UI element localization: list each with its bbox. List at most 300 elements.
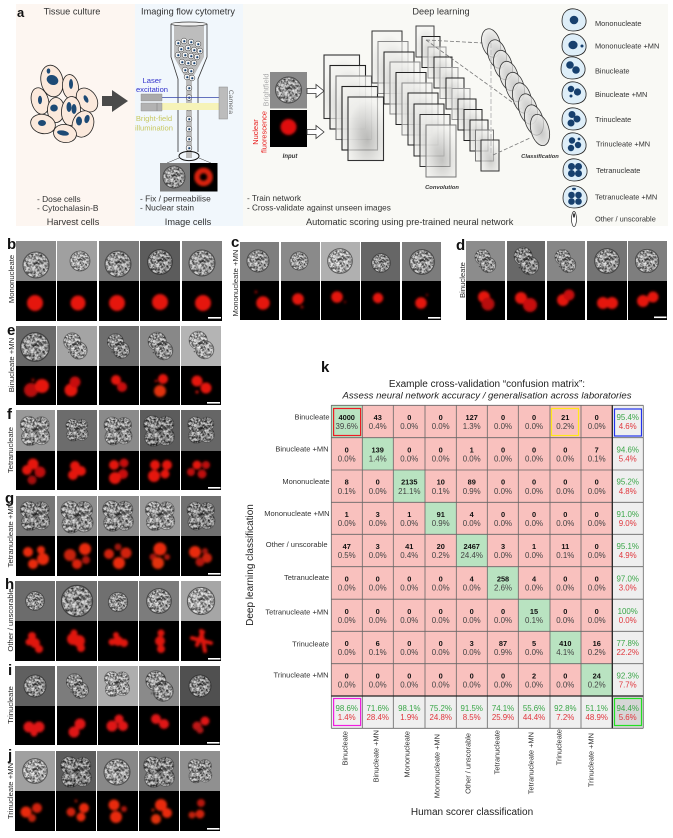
highlight boxes bbox=[334, 408, 642, 726]
recall row: 48.9% bbox=[586, 713, 608, 722]
row: trinucleate: 0.0% bbox=[432, 648, 450, 657]
arrow: brightfield into network bbox=[307, 84, 324, 98]
panel j: trinucleate +MN bbox=[6, 747, 220, 831]
label: camera: Camera bbox=[227, 90, 234, 114]
legend labels: Trinucleate +MN bbox=[596, 140, 650, 148]
row: trinucleate: 0.0% bbox=[338, 648, 356, 657]
column labels bbox=[340, 729, 596, 798]
y axis title: Deep learning classification bbox=[245, 504, 256, 626]
brightfield row e bbox=[16, 326, 221, 366]
row: trinucleate: 0.0% bbox=[463, 648, 481, 657]
precision column: 4.9% bbox=[619, 551, 637, 560]
column labels: Tetranucleate bbox=[492, 730, 502, 774]
row: tetranucleate: 0.0% bbox=[556, 584, 574, 593]
recall row: 92.8% bbox=[554, 704, 576, 713]
legend labels: Binucleate bbox=[595, 66, 630, 76]
row: mononucleate +MN: 0.9% bbox=[432, 519, 450, 528]
row: binucleate +MN: 7 bbox=[595, 445, 599, 454]
legend labels: Binucleate +MN bbox=[595, 90, 647, 99]
label: nuclear fluorescence: Nuclear bbox=[251, 119, 260, 145]
row: mononucleate +MN: 0.0% bbox=[369, 519, 387, 528]
side label: tetranucleate +MN: Tetranucleate +MN bbox=[6, 503, 15, 567]
classification layer bbox=[479, 27, 553, 148]
row: tetranucleate +MN: 0 bbox=[345, 607, 349, 616]
row: trinucleate: 0 bbox=[439, 639, 443, 648]
row: trinucleate +MN: 0.0% bbox=[463, 681, 481, 690]
row: trinucleate +MN: 0 bbox=[501, 671, 505, 680]
column labels: Mononucleate bbox=[402, 731, 412, 777]
row: tetranucleate bbox=[338, 574, 606, 593]
row: mononucleate: 0.9% bbox=[463, 487, 481, 496]
label: convolution: Convolution bbox=[425, 185, 459, 191]
diagram: flow cytometer bbox=[167, 22, 211, 163]
row: mononucleate: 0 bbox=[376, 478, 380, 487]
precision column: 4.6% bbox=[619, 422, 637, 431]
panel i: trinucleate bbox=[6, 662, 220, 745]
row: other / unscorable: 47 bbox=[343, 542, 351, 551]
row: mononucleate +MN: 0 bbox=[595, 510, 599, 519]
row: binucleate: 0 bbox=[532, 413, 536, 422]
row: trinucleate: 410 bbox=[559, 639, 571, 648]
text: train network: - Train network bbox=[247, 194, 301, 203]
side label: tetranucleate: Tetranucleate bbox=[6, 427, 15, 473]
panel letter c: c bbox=[231, 234, 239, 251]
row: trinucleate +MN: 0 bbox=[345, 671, 349, 680]
recall row: 98.6% bbox=[336, 704, 358, 713]
row: binucleate +MN bbox=[338, 445, 606, 464]
label: bright-field illumination: Bright-field bbox=[136, 114, 172, 123]
row: binucleate: 39.6% bbox=[336, 422, 358, 431]
row: tetranucleate +MN: 0.0% bbox=[588, 616, 606, 625]
row: mononucleate +MN: 0.0% bbox=[494, 519, 512, 528]
row: tetranucleate +MN: 0.0% bbox=[338, 616, 356, 625]
panel letter f: f bbox=[7, 406, 13, 423]
row labels: Mononucleate +MN bbox=[264, 509, 330, 518]
row: trinucleate bbox=[338, 639, 606, 657]
label: input: Input bbox=[283, 154, 298, 160]
row: mononucleate: 0.0% bbox=[525, 487, 543, 496]
row: trinucleate +MN: 0.0% bbox=[369, 681, 387, 690]
row: binucleate: 0.2% bbox=[556, 422, 574, 431]
recall row: 75.2% bbox=[430, 704, 452, 713]
row: trinucleate +MN: 24 bbox=[593, 671, 602, 680]
row: other / unscorable: 0.0% bbox=[494, 551, 512, 560]
class icon: mononucleate +MN bbox=[562, 34, 586, 56]
row: trinucleate: 87 bbox=[499, 639, 507, 648]
panel h: other / unscorable bbox=[5, 576, 221, 661]
label: brightfield: Brightfield bbox=[262, 74, 270, 106]
row: mononucleate: 0.1% bbox=[338, 487, 356, 496]
legend labels: Other / unscorable bbox=[595, 214, 656, 224]
row: trinucleate +MN: 0.0% bbox=[494, 681, 512, 690]
row: binucleate: 21 bbox=[561, 413, 569, 422]
row: binucleate: 0 bbox=[595, 413, 599, 422]
row: tetranucleate: 0.0% bbox=[432, 584, 450, 593]
fluorescence row f bbox=[16, 451, 221, 490]
precision column: 5.4% bbox=[619, 455, 637, 464]
row: binucleate: 1.3% bbox=[463, 422, 481, 431]
row: other / unscorable: 0 bbox=[595, 542, 599, 551]
row: mononucleate: 0 bbox=[563, 478, 567, 487]
column labels: Trinucleate bbox=[554, 729, 564, 765]
fluorescence row j bbox=[15, 791, 220, 831]
side label: trinucleate: Trinucleate bbox=[6, 686, 15, 724]
side label: binucleate: Binucleate bbox=[458, 262, 467, 298]
recall row: 94.4% bbox=[617, 704, 639, 713]
arrow: culture to cytometry bbox=[102, 90, 128, 112]
row: trinucleate +MN: 2 bbox=[532, 671, 536, 680]
arrow: fluorescence into network bbox=[307, 126, 324, 138]
row: tetranucleate +MN: 15 bbox=[530, 607, 538, 616]
laser and illumination optics bbox=[141, 87, 228, 119]
row: mononucleate +MN: 1 bbox=[407, 510, 411, 519]
text: fix and nuclear stain: - Fix / permeabilise bbox=[140, 194, 211, 204]
row: tetranucleate: 0.0% bbox=[338, 584, 356, 593]
row: binucleate +MN: 0.0% bbox=[494, 455, 512, 464]
fluorescence row b bbox=[16, 281, 222, 321]
row: mononucleate +MN: 0.0% bbox=[463, 519, 481, 528]
precision column: 77.8% bbox=[617, 639, 639, 648]
row: trinucleate: 0.1% bbox=[369, 648, 387, 657]
row: mononucleate +MN: 0.0% bbox=[525, 519, 543, 528]
label: bright-field illumination: illumination bbox=[135, 124, 173, 132]
row: mononucleate +MN: 0.0% bbox=[588, 519, 606, 528]
row: binucleate +MN: 0.0% bbox=[525, 455, 543, 464]
recall row: 1.9% bbox=[400, 713, 418, 722]
side label: trinucleate +MN: Trinucleate +MN bbox=[6, 763, 15, 819]
panel letter h: h bbox=[5, 576, 14, 593]
row: tetranucleate: 2.6% bbox=[494, 584, 512, 593]
row: binucleate: 0 bbox=[501, 413, 505, 422]
row: binucleate +MN: 1.4% bbox=[369, 455, 387, 464]
row: trinucleate: 0 bbox=[407, 639, 411, 648]
class icon: binucleate bbox=[561, 57, 585, 79]
class icon: trinucleate +MN bbox=[562, 133, 586, 155]
row: trinucleate +MN: 0 bbox=[376, 671, 380, 680]
row: mononucleate +MN: 0.0% bbox=[338, 519, 356, 528]
row: tetranucleate +MN bbox=[338, 607, 606, 625]
class icon: binucleate +MN bbox=[562, 82, 586, 104]
row: trinucleate +MN: 0.0% bbox=[432, 681, 450, 690]
recall row: 51.1% bbox=[586, 704, 608, 713]
row: mononucleate: 2135 bbox=[401, 478, 418, 487]
recall row: 55.6% bbox=[523, 704, 545, 713]
panel a background: imaging flow cytometry bbox=[135, 4, 243, 226]
fluorescence row e bbox=[16, 366, 221, 405]
panel b: mononucleate bbox=[7, 236, 222, 321]
row: other / unscorable: 1 bbox=[532, 542, 536, 551]
recall row bbox=[336, 704, 639, 722]
row: binucleate: 0.0% bbox=[494, 422, 512, 431]
side label: binucleate +MN: Binucleate +MN bbox=[7, 338, 16, 392]
recall row: 25.9% bbox=[492, 713, 514, 722]
row labels: Binucleate +MN bbox=[275, 444, 328, 454]
row: other / unscorable: 0.1% bbox=[556, 551, 574, 560]
row: trinucleate +MN: 0 bbox=[407, 671, 411, 680]
row: trinucleate: 0 bbox=[345, 639, 349, 648]
row: tetranucleate: 0 bbox=[407, 574, 411, 583]
heading: tissue culture: Tissue culture bbox=[44, 6, 100, 16]
row: tetranucleate +MN: 0.0% bbox=[463, 616, 481, 625]
icon: tissue culture cells bbox=[28, 63, 102, 144]
fluorescence row g bbox=[16, 536, 221, 576]
row: tetranucleate: 0.0% bbox=[463, 584, 481, 593]
panel k: confusion matrix bbox=[245, 359, 643, 818]
x axis title: Human scorer classification bbox=[411, 807, 533, 818]
row: binucleate +MN: 139 bbox=[372, 445, 384, 454]
row: trinucleate +MN: 0.0% bbox=[556, 681, 574, 690]
row: binucleate +MN: 0 bbox=[439, 445, 443, 454]
row: tetranucleate: 0.0% bbox=[369, 584, 387, 593]
row: binucleate +MN: 0.0% bbox=[432, 455, 450, 464]
heading: imaging flow cytometry: Imaging flow cytometry bbox=[141, 6, 235, 16]
text: dose cells: - Cytochalasin-B bbox=[37, 203, 99, 213]
row: mononucleate: 21.1% bbox=[398, 487, 420, 496]
row: binucleate: 0.0% bbox=[400, 422, 418, 431]
convolution layers: group 1 bbox=[324, 55, 384, 160]
row: trinucleate: 0.0% bbox=[400, 648, 418, 657]
row: mononucleate: 10 bbox=[437, 478, 445, 487]
row labels: Other / unscorable bbox=[266, 540, 328, 549]
row labels: Binucleate bbox=[294, 412, 330, 422]
row: mononucleate: 8 bbox=[345, 478, 349, 487]
precision column: 91.0% bbox=[617, 510, 639, 519]
column labels: Trinucleate +MN bbox=[586, 733, 596, 787]
row: trinucleate: 3 bbox=[470, 639, 474, 648]
row: tetranucleate: 258 bbox=[497, 574, 509, 583]
row: binucleate: 4000 bbox=[338, 413, 355, 422]
row: tetranucleate +MN: 0 bbox=[563, 607, 567, 616]
row: trinucleate +MN: 0 bbox=[470, 671, 474, 680]
input images bbox=[270, 72, 307, 147]
row labels: Tetranucleate bbox=[284, 573, 329, 582]
precision column: 95.4% bbox=[617, 413, 639, 422]
recall row: 74.1% bbox=[492, 704, 514, 713]
legend labels bbox=[595, 19, 659, 224]
row: binucleate +MN: 1 bbox=[470, 445, 474, 454]
row: tetranucleate +MN: 0.1% bbox=[525, 616, 543, 625]
recall row: 28.4% bbox=[367, 713, 389, 722]
legend labels: Tetranucleate +MN bbox=[595, 192, 657, 202]
row: other / unscorable: 2467 bbox=[463, 542, 480, 551]
row: other / unscorable: 24.4% bbox=[461, 551, 483, 560]
row: mononucleate: 0.0% bbox=[556, 487, 574, 496]
matrix grid lines bbox=[331, 405, 643, 728]
precision column: 9.0% bbox=[619, 519, 637, 528]
panel letter i: i bbox=[8, 662, 12, 679]
row: tetranucleate +MN: 0.0% bbox=[494, 616, 512, 625]
column labels: Tetranucleate +MN bbox=[526, 732, 536, 794]
row: tetranucleate +MN: 0 bbox=[439, 607, 443, 616]
side label: other / unscorable: Other / unscorable bbox=[6, 588, 15, 652]
row: trinucleate +MN: 0.0% bbox=[525, 681, 543, 690]
matrix cell backgrounds bbox=[331, 405, 643, 728]
row: mononucleate +MN: 0 bbox=[501, 510, 505, 519]
convolution layers: group 2 bbox=[372, 31, 456, 177]
fluorescence row d bbox=[466, 281, 667, 320]
panel e: binucleate +MN bbox=[7, 322, 221, 405]
row: tetranucleate +MN: 0.0% bbox=[400, 616, 418, 625]
row: tetranucleate +MN: 0.0% bbox=[369, 616, 387, 625]
precision column: 94.6% bbox=[617, 445, 639, 454]
matrix values bbox=[336, 413, 606, 690]
text: fix and nuclear stain: - Nuclear stain bbox=[140, 202, 194, 212]
recall row: 98.1% bbox=[398, 704, 420, 713]
row: binucleate +MN: 0 bbox=[501, 445, 505, 454]
row: trinucleate +MN: 0.0% bbox=[338, 681, 356, 690]
row: tetranucleate +MN: 0 bbox=[595, 607, 599, 616]
row: mononucleate: 89 bbox=[468, 478, 476, 487]
row: binucleate +MN: 0 bbox=[407, 445, 411, 454]
row: tetranucleate: 4 bbox=[470, 574, 475, 583]
brightfield row b bbox=[16, 241, 222, 281]
panel letter e: e bbox=[7, 322, 15, 339]
row: other / unscorable: 0.5% bbox=[338, 551, 356, 560]
row: mononucleate: 0.0% bbox=[369, 487, 387, 496]
row: binucleate +MN: 0 bbox=[563, 445, 567, 454]
recall row: 5.6% bbox=[619, 713, 637, 722]
row: binucleate bbox=[336, 413, 606, 431]
brightfield row h bbox=[15, 581, 221, 621]
row: mononucleate: 0.1% bbox=[432, 487, 450, 496]
panel letter b: b bbox=[7, 236, 16, 253]
row: binucleate +MN: 0.1% bbox=[588, 455, 606, 464]
precision column: 0.0% bbox=[619, 616, 637, 625]
row: trinucleate +MN: 0 bbox=[563, 671, 567, 680]
precision column: 97.0% bbox=[617, 574, 639, 583]
row: other / unscorable: 20 bbox=[437, 542, 445, 551]
row: mononucleate: 0 bbox=[501, 478, 505, 487]
row: mononucleate +MN: 3 bbox=[376, 510, 380, 519]
precision column: 95.1% bbox=[617, 542, 639, 551]
recall row: 24.8% bbox=[430, 713, 452, 722]
row: binucleate: 0.0% bbox=[525, 422, 543, 431]
column labels: Other / unscorable bbox=[464, 733, 472, 794]
row: tetranucleate: 0 bbox=[376, 574, 380, 583]
legend labels: Tetranucleate bbox=[596, 166, 640, 175]
row: tetranucleate +MN: 0.0% bbox=[556, 616, 574, 625]
text: dose cells: - Dose cells bbox=[37, 194, 81, 204]
class icon: mononucleate bbox=[562, 9, 586, 31]
recall row: 1.4% bbox=[338, 713, 356, 722]
row: binucleate +MN: 0.0% bbox=[400, 455, 418, 464]
row: mononucleate +MN: 0.0% bbox=[556, 519, 574, 528]
row: mononucleate: 0.0% bbox=[494, 487, 512, 496]
panel g: tetranucleate +MN bbox=[5, 490, 221, 576]
fluorescence row i bbox=[15, 706, 220, 745]
image: cytometer brightfield and fluorescence output bbox=[160, 163, 218, 192]
recall row: 44.4% bbox=[523, 713, 545, 722]
chart subtitle: Assess neural network accuracy / generalisation across laboratories bbox=[341, 390, 632, 402]
row: binucleate: 0 bbox=[439, 413, 443, 422]
brightfield row d bbox=[466, 241, 667, 281]
dashed projection lines bbox=[426, 40, 530, 155]
row: mononucleate: 0.0% bbox=[588, 487, 606, 496]
row: other / unscorable: 0.2% bbox=[432, 551, 450, 560]
recall row: 71.6% bbox=[367, 704, 389, 713]
row: binucleate: 127 bbox=[466, 413, 478, 422]
row: other / unscorable: 3 bbox=[376, 542, 380, 551]
row: mononucleate +MN: 0.0% bbox=[400, 519, 418, 528]
panel c: mononucleate +MN bbox=[231, 234, 441, 320]
row: binucleate +MN: 0 bbox=[532, 445, 536, 454]
fluorescence row c bbox=[240, 281, 441, 320]
recall row: 8.5% bbox=[463, 713, 481, 722]
row: trinucleate: 0.2% bbox=[588, 648, 606, 657]
legend: output classes bbox=[561, 9, 659, 226]
panel d: binucleate bbox=[456, 237, 667, 320]
row labels: Trinucleate +MN bbox=[274, 670, 328, 680]
side label: mononucleate: Mononucleate bbox=[7, 255, 16, 303]
row: tetranucleate: 0 bbox=[563, 574, 567, 583]
column labels: Binucleate bbox=[340, 731, 350, 766]
row: other / unscorable: 0.0% bbox=[369, 551, 387, 560]
row labels bbox=[264, 412, 330, 680]
row: binucleate: 0.4% bbox=[369, 422, 387, 431]
caption: image cells: Image cells bbox=[165, 217, 212, 227]
precision column: 22.2% bbox=[617, 648, 639, 657]
chart title: Example cross-validation “confusion matrix”: bbox=[389, 379, 585, 390]
row: trinucleate +MN: 0 bbox=[439, 671, 443, 680]
row: tetranucleate +MN: 0 bbox=[470, 607, 474, 616]
row: mononucleate +MN: 0 bbox=[563, 510, 567, 519]
heading: deep learning: Deep learning bbox=[412, 6, 470, 16]
row: tetranucleate +MN: 0.0% bbox=[432, 616, 450, 625]
row: trinucleate +MN: 0.2% bbox=[588, 681, 606, 690]
label: nuclear fluorescence: fluorescence bbox=[260, 111, 269, 153]
row: trinucleate +MN bbox=[338, 671, 606, 690]
row: tetranucleate +MN: 0 bbox=[407, 607, 411, 616]
row: other / unscorable: 41 bbox=[405, 542, 413, 551]
label: laser excitation: Laser bbox=[142, 76, 162, 85]
row: tetranucleate: 0 bbox=[439, 574, 443, 583]
panel letter k: k bbox=[321, 359, 330, 376]
row: binucleate +MN: 0.0% bbox=[556, 455, 574, 464]
recall row: 91.5% bbox=[461, 704, 483, 713]
row: tetranucleate: 0.0% bbox=[400, 584, 418, 593]
precision column: 3.0% bbox=[619, 584, 637, 593]
row: binucleate: 43 bbox=[374, 413, 382, 422]
legend labels: Mononucleate +MN bbox=[595, 42, 659, 50]
precision column: 95.2% bbox=[617, 478, 639, 487]
column labels: Binucleate +MN bbox=[372, 730, 380, 782]
panel a background: tissue culture bbox=[16, 4, 135, 226]
brightfield row g bbox=[16, 496, 221, 536]
precision column: 100% bbox=[618, 607, 638, 616]
row labels: Tetranucleate +MN bbox=[265, 608, 328, 616]
fluorescence row h bbox=[15, 621, 221, 661]
row: mononucleate +MN: 0 bbox=[532, 510, 536, 519]
row: other / unscorable: 3 bbox=[501, 542, 505, 551]
legend labels: Mononucleate bbox=[595, 19, 641, 28]
row: tetranucleate: 0.0% bbox=[525, 584, 543, 593]
panel a background: deep learning bbox=[243, 4, 668, 226]
row: binucleate: 0.0% bbox=[588, 422, 606, 431]
row: binucleate +MN: 0.0% bbox=[338, 455, 356, 464]
row: binucleate +MN: 0.0% bbox=[463, 455, 481, 464]
panel f: tetranucleate bbox=[6, 406, 221, 490]
row: other / unscorable bbox=[338, 542, 606, 560]
row: tetranucleate: 4 bbox=[532, 574, 537, 583]
row: mononucleate +MN bbox=[338, 510, 606, 528]
recall row: 7.2% bbox=[556, 713, 574, 722]
row: mononucleate +MN: 91 bbox=[437, 510, 445, 519]
row: tetranucleate: 0.0% bbox=[588, 584, 606, 593]
side label: mononucleate +MN: Mononucleate +MN bbox=[231, 250, 240, 316]
brightfield row c bbox=[240, 242, 441, 281]
label: classification: Classification bbox=[521, 154, 559, 160]
row: trinucleate: 0.0% bbox=[525, 648, 543, 657]
